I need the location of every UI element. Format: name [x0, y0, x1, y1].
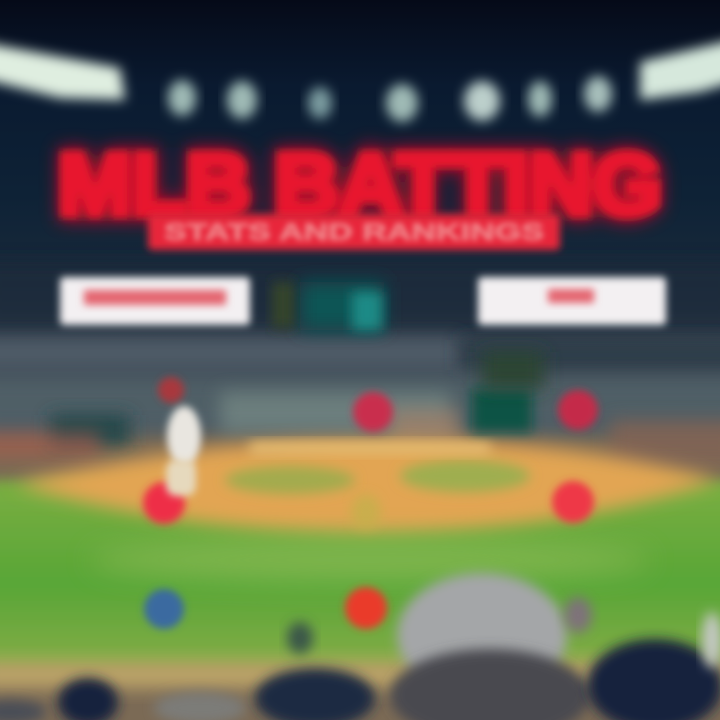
green and yellow team block: [472, 352, 544, 432]
stadium lights: [0, 38, 720, 122]
infield player: [351, 494, 381, 530]
red marker left: [143, 482, 185, 524]
batter figure: [158, 377, 201, 496]
title: MLB batting: MLB BATTING: [60, 137, 660, 233]
subtitle banner: STATS AND RANKINGS: [164, 219, 544, 246]
red marker right: [552, 481, 594, 523]
left white label: [60, 277, 250, 325]
crowd foreground: [0, 573, 720, 720]
field: [0, 440, 720, 688]
teal scoreboard block: [272, 282, 384, 330]
subtitle banner: [148, 214, 560, 250]
title: MLB batting: MLB BATTING: [58, 137, 662, 233]
right white label: [478, 277, 666, 325]
red marker upper centre: [353, 392, 393, 432]
orange-red marker: [345, 587, 387, 629]
blue marker: [144, 589, 184, 629]
red marker upper right: [558, 390, 598, 430]
